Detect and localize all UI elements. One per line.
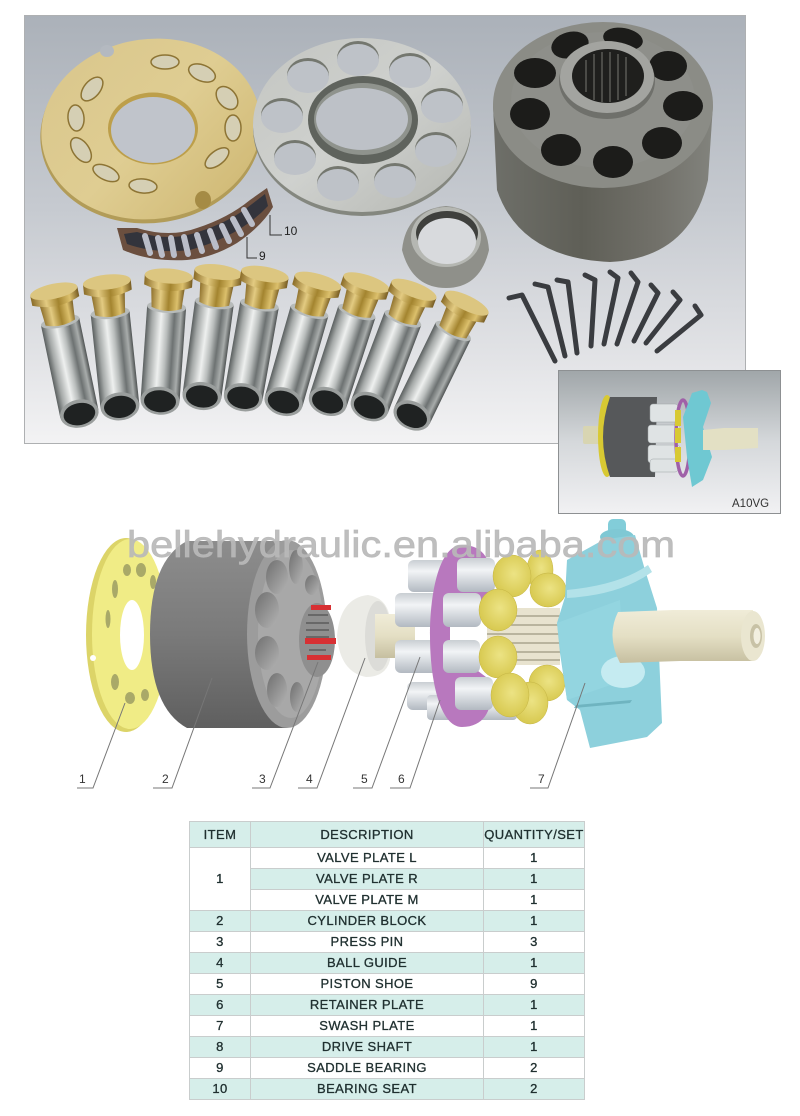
parts table: 1 — [530, 892, 538, 907]
part 2 cylinder block — [150, 540, 336, 728]
part 3 hub and press pins — [299, 603, 336, 677]
part numbers: 1 — [79, 772, 86, 786]
inset yellow plate — [598, 395, 616, 477]
parts table: PRESS PIN — [331, 934, 403, 949]
bearing callouts: 9 — [259, 249, 266, 263]
parts table: 1 — [530, 955, 538, 970]
parts table: VALVE PLATE M — [315, 892, 419, 907]
parts table: RETAINER PLATE — [310, 997, 424, 1012]
saddle bearing — [117, 188, 273, 260]
part 6 retainer plate — [430, 545, 492, 727]
parts table: 1 — [530, 850, 538, 865]
inset drive shaft left — [583, 426, 607, 444]
parts table: 5 — [216, 976, 224, 991]
parts table: CYLINDER BLOCK — [307, 913, 427, 928]
silver retainer plate — [253, 38, 471, 216]
cylinder block — [493, 22, 713, 262]
parts table: 4 — [216, 955, 224, 970]
parts table: PISTON SHOE — [320, 976, 414, 991]
splined shaft — [487, 608, 560, 665]
parts table: 2 — [530, 1081, 538, 1096]
parts table: DESCRIPTION — [320, 826, 414, 842]
part number callouts — [77, 657, 585, 788]
part numbers — [79, 772, 545, 786]
brass valve plate — [28, 25, 274, 238]
parts table: 8 — [216, 1039, 224, 1054]
inset swash plate — [683, 390, 712, 487]
nine pistons with shoes — [29, 261, 492, 439]
parts table: 2 — [530, 1060, 538, 1075]
parts table: BALL GUIDE — [327, 955, 407, 970]
bearing callouts: 10 — [284, 224, 298, 238]
parts table: ITEM — [204, 826, 236, 842]
parts table: 3 — [530, 934, 538, 949]
part 4 ball guide — [337, 595, 391, 677]
inset retainer plate — [676, 400, 690, 476]
inset caption: A10VG — [732, 498, 769, 510]
drive shaft — [612, 610, 765, 663]
inset pistons — [648, 404, 680, 472]
part numbers: 7 — [538, 772, 545, 786]
part 5 pistons rear — [395, 560, 517, 720]
ball guide — [402, 206, 489, 288]
parts table: 9 — [530, 976, 538, 991]
splined hub — [559, 41, 655, 119]
photo panel — [24, 16, 746, 444]
parts table: 1 — [530, 1018, 538, 1033]
part 1 valve plate — [86, 538, 168, 732]
parts table: BEARING SEAT — [317, 1081, 417, 1096]
parts table: 6 — [216, 997, 224, 1012]
parts table: SADDLE BEARING — [307, 1060, 427, 1075]
parts table — [189, 821, 585, 1100]
part numbers: 4 — [306, 772, 313, 786]
parts table: DRIVE SHAFT — [322, 1039, 412, 1054]
piston shoes — [479, 550, 566, 724]
parts table: VALVE PLATE R — [316, 871, 418, 886]
part numbers: 6 — [398, 772, 405, 786]
parts table: 1 — [530, 871, 538, 886]
part numbers: 2 — [162, 772, 169, 786]
parts table: 2 — [216, 913, 224, 928]
parts table: 1 — [530, 1039, 538, 1054]
inset drive shaft right — [703, 428, 758, 450]
part numbers: 5 — [361, 772, 368, 786]
parts table: 10 — [212, 1081, 228, 1096]
parts table: 9 — [216, 1060, 224, 1075]
drive shaft centre — [375, 614, 415, 658]
inset cylinder body — [603, 397, 657, 477]
inset panel: A10VG assembly — [558, 370, 780, 514]
parts table: VALVE PLATE L — [317, 850, 417, 865]
parts table: 1 — [530, 997, 538, 1012]
watermark: bellehydraulic.en.alibaba.com — [127, 524, 675, 565]
part 7 swash plate — [557, 519, 662, 748]
pistons front — [443, 558, 495, 710]
parts table: 1 — [530, 913, 538, 928]
bearing callouts — [247, 215, 298, 263]
parts table: SWASH PLATE — [319, 1018, 415, 1033]
press pins — [509, 272, 701, 361]
part numbers: 3 — [259, 772, 266, 786]
parts table: QUANTITY/SET — [484, 826, 584, 842]
parts table: 1 — [216, 871, 224, 886]
parts table: 3 — [216, 934, 224, 949]
inset shoes — [675, 410, 681, 462]
parts table: 7 — [216, 1018, 224, 1033]
exploded pump diagram — [77, 519, 765, 788]
